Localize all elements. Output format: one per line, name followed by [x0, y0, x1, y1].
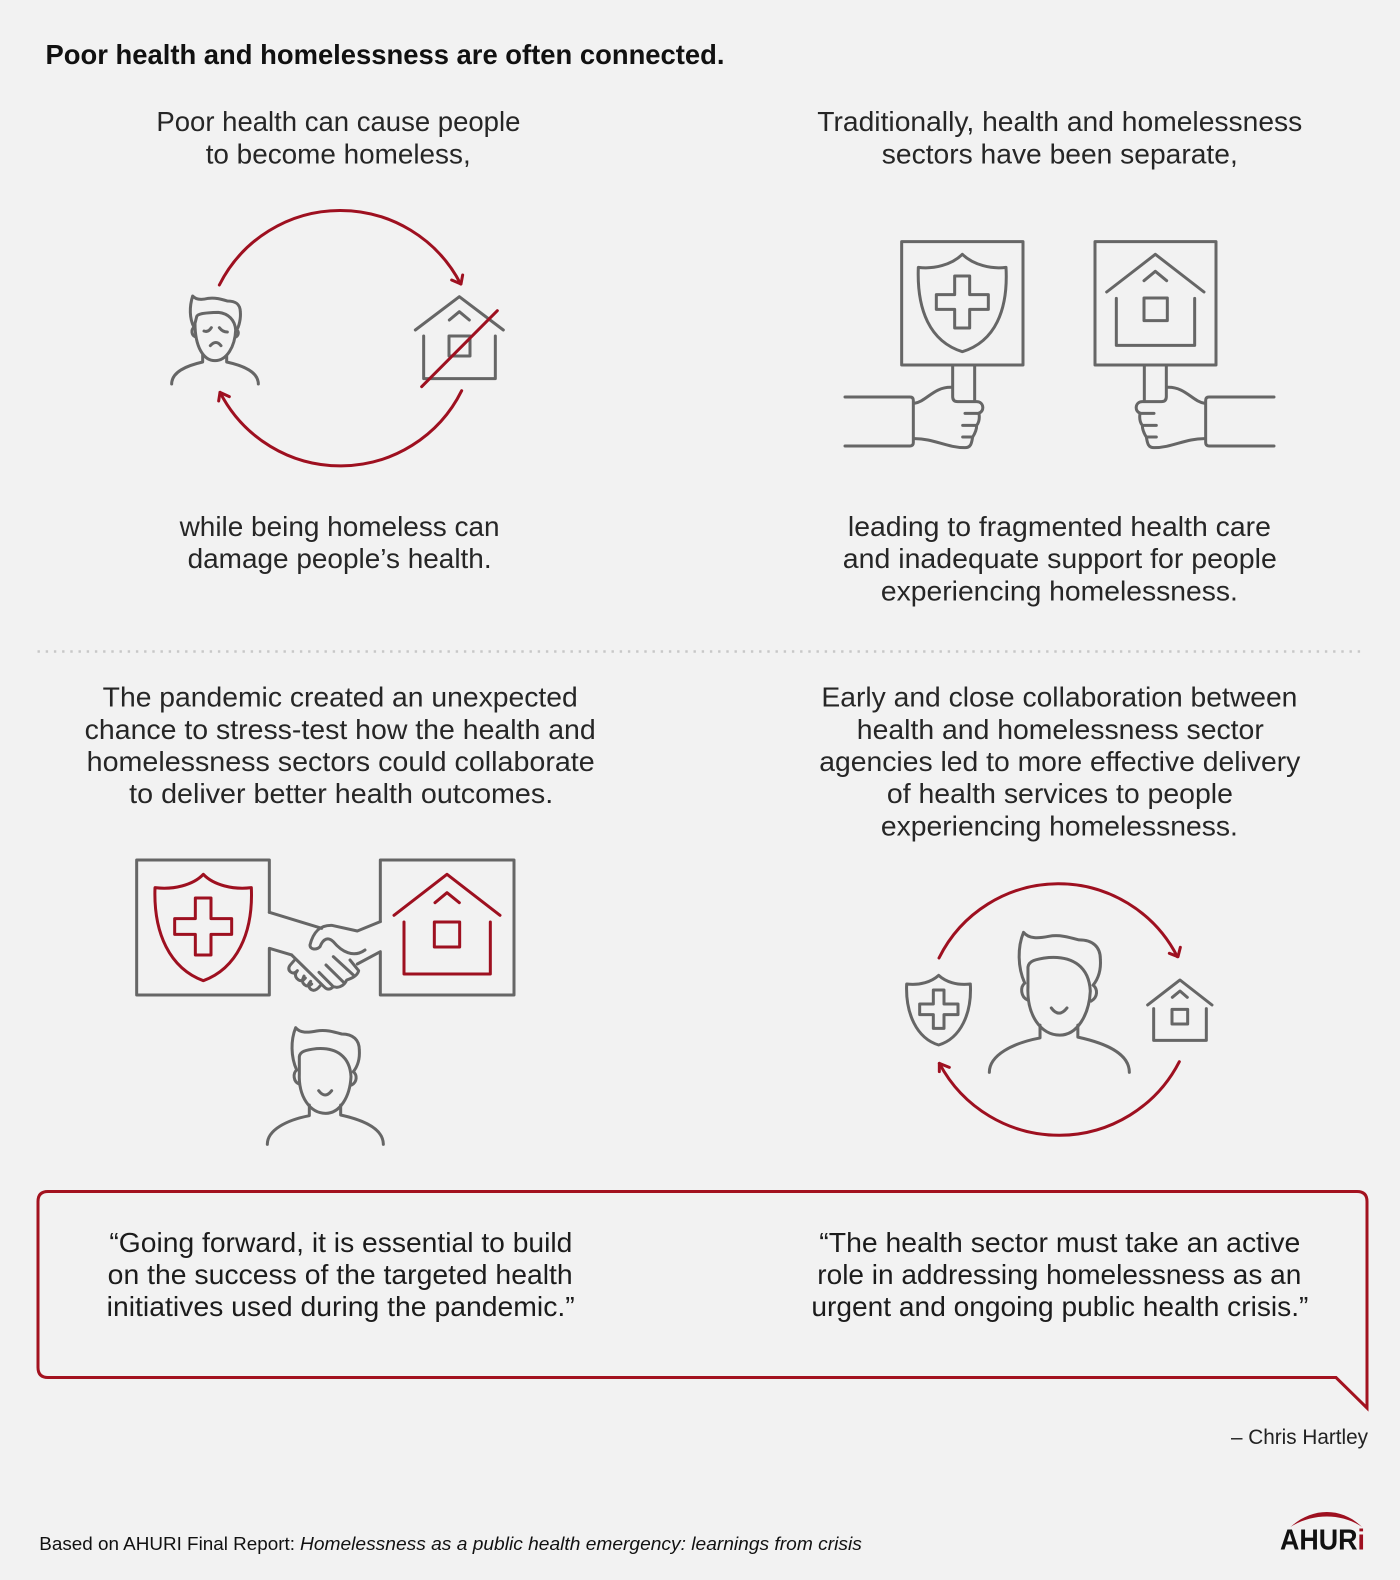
text block: sectors separate: Traditionally, health and homelessness [817, 106, 1302, 137]
icon: red shield [155, 874, 251, 981]
quote: right: “The health sector must take an active [819, 1227, 1300, 1258]
quote: left [107, 1227, 575, 1322]
text block: homelessness damages health: while being homeless can [179, 511, 500, 542]
text block: pandemic stress-test: chance to stress-test how the health and [85, 714, 596, 745]
quote: right [811, 1227, 1308, 1322]
text block: fragmented health care: leading to fragmented health care [848, 511, 1271, 542]
text block: homelessness damages health [179, 511, 500, 574]
icon: house [1148, 980, 1212, 1040]
icon: separate health and housing signs [845, 242, 1274, 448]
arrow: house to person [219, 391, 462, 466]
quote: left: on the success of the targeted health [108, 1259, 573, 1290]
text block: early collaboration [819, 682, 1300, 842]
text block: homelessness damages health: damage people’s health. [188, 543, 492, 574]
text block: poor health causes homelessness: to become homeless, [206, 138, 471, 170]
callout: speech bubble with quotes [38, 1192, 1367, 1408]
footer source: Homelessness as a public health emergency: learnings from crisis [300, 1533, 862, 1554]
text block: early collaboration: Early and close collaboration between [821, 682, 1297, 712]
icon: smiling person [267, 1028, 383, 1144]
icon: shield [907, 975, 970, 1045]
icon: housing sign held by hand [1095, 242, 1274, 448]
logo: AHURI: AHURi [1280, 1524, 1365, 1556]
quote: right: role in addressing homelessness as an [817, 1259, 1301, 1290]
icon: large person [989, 932, 1129, 1072]
quote: left: “Going forward, it is essential to build [109, 1227, 572, 1258]
footer source [39, 1533, 862, 1554]
title: Poor health and homelessness are often connected. [46, 39, 724, 70]
text block: early collaboration: agencies led to more effective delivery [819, 746, 1300, 777]
arrow: shield to house [939, 884, 1180, 958]
text block: pandemic stress-test: to deliver better health outcomes. [129, 778, 553, 809]
icon: red house [394, 874, 500, 974]
text block: fragmented health care [843, 511, 1277, 606]
icon: health box with handshake [137, 860, 514, 995]
arrow: person to house [219, 210, 463, 285]
quote: left: initiatives used during the pandemic.” [107, 1291, 575, 1322]
footer source: Based on AHURI Final Report: [39, 1533, 295, 1554]
attribution: – Chris Hartley [1231, 1426, 1368, 1449]
quote: right: urgent and ongoing public health crisis.” [811, 1291, 1308, 1322]
icon: collaboration cycle around person [907, 884, 1212, 1135]
text block: poor health causes homelessness [156, 106, 520, 170]
text block: pandemic stress-test: The pandemic created an unexpected [103, 682, 578, 712]
icon: sad person [172, 296, 258, 384]
icon: homelessness and health cycle [172, 210, 503, 466]
text block: sectors separate [817, 106, 1302, 170]
text block: early collaboration: experiencing homelessness. [881, 810, 1238, 842]
text block: fragmented health care: and inadequate support for people [843, 543, 1277, 574]
text block: early collaboration: health and homelessness sector [857, 714, 1264, 745]
arrow: house to shield [939, 1062, 1179, 1135]
text block: early collaboration: of health services to people [887, 778, 1233, 809]
icon: health sign held by hand [845, 242, 1023, 448]
icon: handshake between health and housing [137, 860, 514, 1144]
text block: pandemic stress-test [85, 682, 596, 809]
text block: poor health causes homelessness: Poor health can cause people [156, 106, 520, 137]
text block: fragmented health care: experiencing homelessness. [881, 576, 1238, 606]
text block: sectors separate: sectors have been separate, [882, 138, 1238, 170]
text block: pandemic stress-test: homelessness sectors could collaborate [87, 746, 595, 777]
icon: crossed-out house [415, 297, 503, 387]
